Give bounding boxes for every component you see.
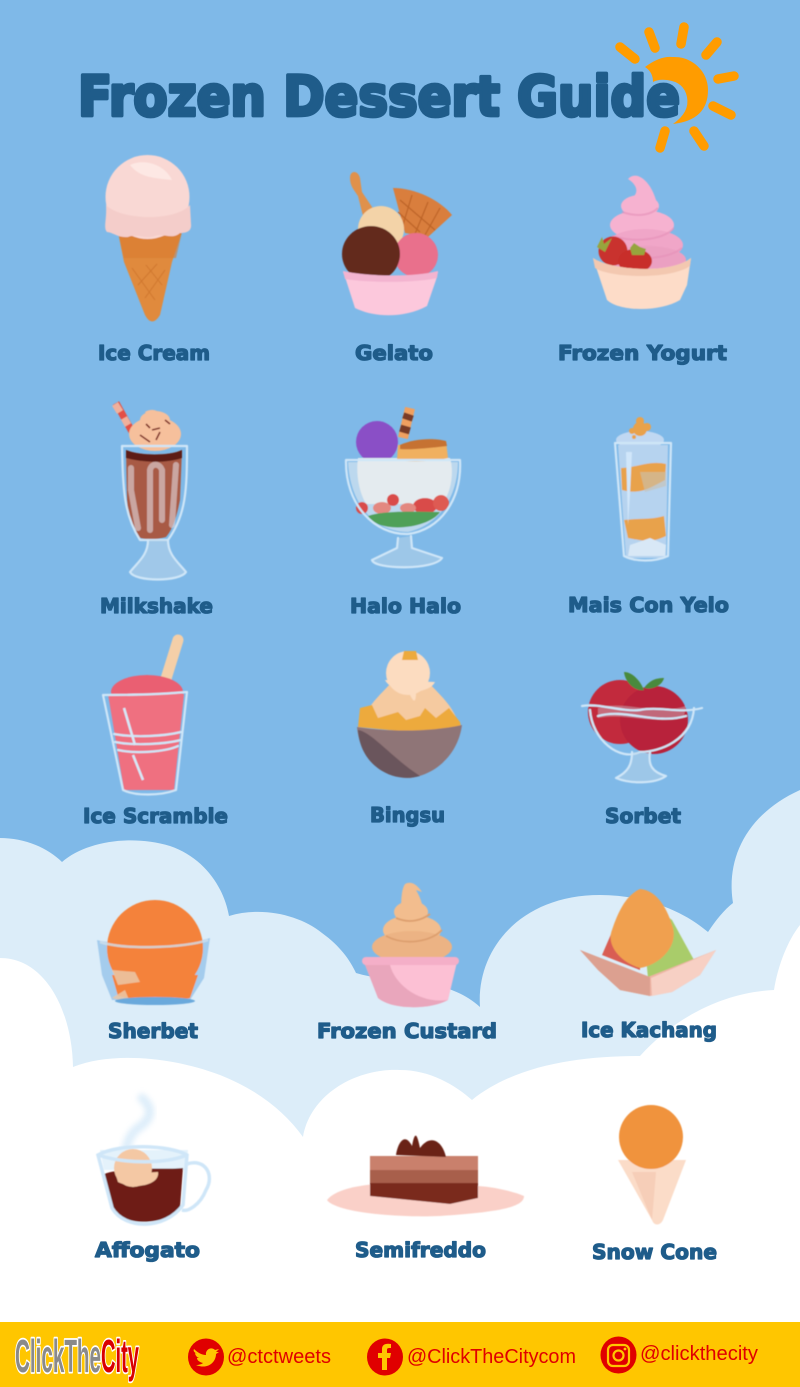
facebook handle: @ClickTheCitycom (407, 1346, 576, 1368)
panel: sherbet (97, 900, 210, 1043)
icon: sherbet bowl (97, 900, 210, 1005)
label: Bingsu (370, 803, 445, 827)
label: Ice Cream (98, 341, 210, 365)
icon: frozen custard cup (362, 883, 459, 1007)
footer bar: City (101, 1330, 139, 1382)
panel: frozen custard (317, 883, 497, 1043)
label: Milkshake (100, 594, 213, 618)
icon: frozen yogurt cup (593, 176, 691, 309)
panel: gelato (342, 172, 452, 365)
icon: gelato cup (342, 172, 452, 315)
label: Gelato (355, 341, 433, 365)
logo: ClickThe (15, 1330, 101, 1382)
label: Semifreddo (355, 1238, 486, 1262)
panel: ice scramble (83, 640, 228, 828)
icon: steam (126, 1098, 150, 1148)
panel: ice kachang (580, 889, 717, 1042)
label: Ice Kachang (581, 1018, 717, 1042)
panel: ice cream (98, 155, 210, 365)
panel: halo halo (346, 408, 461, 618)
panel: semifreddo (327, 1136, 524, 1262)
label: Frozen Custard (317, 1019, 497, 1043)
label: Ice Scramble (83, 804, 228, 828)
twitter handle: @ctctweets (227, 1346, 331, 1368)
icon: mais con yelo glass (615, 417, 671, 560)
icon: facebook (367, 1338, 403, 1376)
icon: twitter (188, 1338, 224, 1376)
label: Halo Halo (350, 594, 461, 618)
icon: sun (620, 27, 734, 148)
icon: ice kachang bowl (580, 889, 716, 996)
panel: snow cone (592, 1105, 717, 1264)
icon: semifreddo cake (327, 1136, 524, 1216)
icon: ice cream cone (105, 155, 191, 322)
front cloud (0, 925, 800, 1322)
panel: bingsu (357, 651, 462, 827)
icon: sorbet glass (582, 672, 702, 782)
icon: milkshake glass (115, 403, 187, 580)
back cloud (0, 790, 800, 1330)
panel: sorbet (582, 672, 702, 828)
panel: frozen yogurt (558, 176, 727, 365)
label: Sherbet (108, 1019, 198, 1043)
label: Affogato (95, 1238, 200, 1262)
instagram handle: @clickthecity (640, 1343, 758, 1365)
icon: halo halo bowl (346, 408, 460, 567)
panel: milkshake (100, 403, 213, 618)
title: Frozen Dessert Guide (78, 64, 680, 128)
panel: mais con yelo (568, 417, 729, 617)
icon: snow cone (618, 1105, 686, 1224)
label: Sorbet (605, 804, 681, 828)
label: Snow Cone (592, 1240, 717, 1264)
icon: ice scramble cup (103, 640, 187, 794)
icon: affogato cup (98, 1147, 209, 1224)
panel: affogato (95, 1098, 209, 1262)
label: Frozen Yogurt (558, 341, 727, 365)
icon: instagram (600, 1336, 636, 1374)
label: Mais Con Yelo (568, 593, 729, 617)
footer bar (0, 1322, 800, 1387)
logo (15, 1330, 139, 1382)
icon: bingsu bowl (357, 651, 462, 778)
